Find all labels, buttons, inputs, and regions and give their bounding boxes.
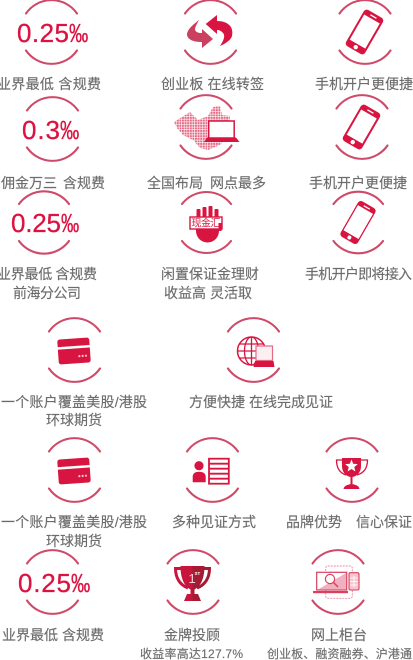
- ring arcs: [19, 191, 69, 254]
- icon: gold trophy: 1: [188, 571, 196, 586]
- panel: row 2 network: [147, 95, 266, 191]
- sublabel: 前海分公司: [13, 285, 81, 301]
- label: 网上柜台: [311, 627, 367, 643]
- ring arcs: [168, 550, 218, 614]
- ring arcs: [312, 550, 364, 614]
- label: 信心保证: [356, 514, 412, 530]
- icon: person and form: [193, 459, 229, 484]
- rate figure: 0.25: [17, 18, 69, 48]
- ring arcs: [49, 438, 100, 502]
- ring arcs: [340, 0, 390, 64]
- label: 手机开户更便捷: [309, 175, 407, 191]
- panel: row 5 witness: [172, 438, 256, 530]
- sublabel: 环球期货: [46, 533, 102, 549]
- sublabel: 收益高 灵活取: [164, 285, 252, 301]
- panel: row 5 account: [1, 438, 147, 549]
- ring arcs: [336, 95, 388, 159]
- icon: bank card: [56, 337, 92, 365]
- label: 手机开户更便捷: [315, 76, 413, 92]
- label: 闲置保证金理财: [161, 266, 259, 282]
- ring arcs: [185, 0, 236, 64]
- ring arcs: [187, 438, 238, 502]
- label: 一个账户覆盖美股/港股: [1, 394, 147, 410]
- icon: phone: [341, 103, 382, 151]
- rate figure: ‰: [69, 18, 88, 48]
- icon: map and laptop: [174, 106, 240, 150]
- panel: row 6 counter: [267, 550, 412, 660]
- icon: phone: [344, 8, 385, 56]
- icon: gold trophy: ST: [194, 571, 201, 576]
- icon: bank card: [56, 457, 92, 485]
- ring arcs: [26, 0, 77, 64]
- label: 多种见证方式: [172, 514, 256, 530]
- label: 创业板 在线转签: [161, 76, 264, 92]
- panel: row 6 fee: [2, 550, 104, 643]
- panel: row 2 fee: [1, 97, 105, 191]
- icon: gold trophy: [176, 566, 210, 601]
- rate figure: 0.25: [18, 568, 71, 598]
- label: 方便快捷 在线完成见证: [189, 394, 333, 410]
- ring arcs: [49, 318, 100, 382]
- panel: row 1 transfer: [161, 0, 264, 92]
- rate figure: ‰: [71, 568, 90, 598]
- ring arcs: [326, 438, 378, 502]
- label: 业界最低 含规费: [2, 627, 104, 643]
- label: 手机开户即将接入: [305, 266, 412, 282]
- ring arcs: [228, 318, 279, 382]
- panel: row 2 phone: [309, 95, 407, 191]
- panel: row 3 cash: [161, 192, 259, 301]
- panel: row 3 fee: [0, 191, 97, 301]
- label: 网点最多: [210, 175, 266, 191]
- icon: laptop and phone: [313, 566, 359, 598]
- ring arcs: [27, 550, 78, 614]
- label: 全国布局: [147, 175, 203, 191]
- rate figure: ‰: [61, 209, 79, 238]
- label: 业界最低 含规费: [0, 76, 101, 92]
- sublabel: 环球期货: [46, 412, 102, 428]
- panel: row 3 phone: [305, 192, 412, 282]
- panel: row 6 advisor: [140, 550, 243, 660]
- label: 金牌投顾: [164, 627, 220, 643]
- rate figure: ‰: [60, 115, 79, 145]
- icon: hand with sign: 现金汇: [192, 216, 220, 230]
- rate figure: [22, 115, 79, 145]
- label: 一个账户覆盖美股/港股: [1, 514, 147, 530]
- label: 含规费: [63, 175, 105, 191]
- panel: row 4 account: [1, 318, 147, 428]
- icon: swap arrows: [187, 15, 232, 48]
- rate figure: 0.3: [22, 115, 60, 145]
- label: 品牌优势: [286, 514, 342, 530]
- ring arcs: [334, 192, 383, 253]
- panel: row 5 brand: [286, 438, 412, 530]
- icon: phone outline: [339, 200, 377, 245]
- panel: row 4 online: [189, 318, 333, 410]
- ring arcs: [180, 95, 232, 159]
- ring arcs: [27, 97, 78, 161]
- panel: row 1 fee: [0, 0, 101, 92]
- panel: row 1 phone: [315, 0, 413, 92]
- icon: globe and laptop: [238, 337, 274, 367]
- label: 佣金万三: [1, 175, 57, 191]
- rate figure: 0.25: [11, 208, 61, 238]
- ring arcs: [182, 192, 231, 253]
- icon: star trophy: [336, 458, 368, 489]
